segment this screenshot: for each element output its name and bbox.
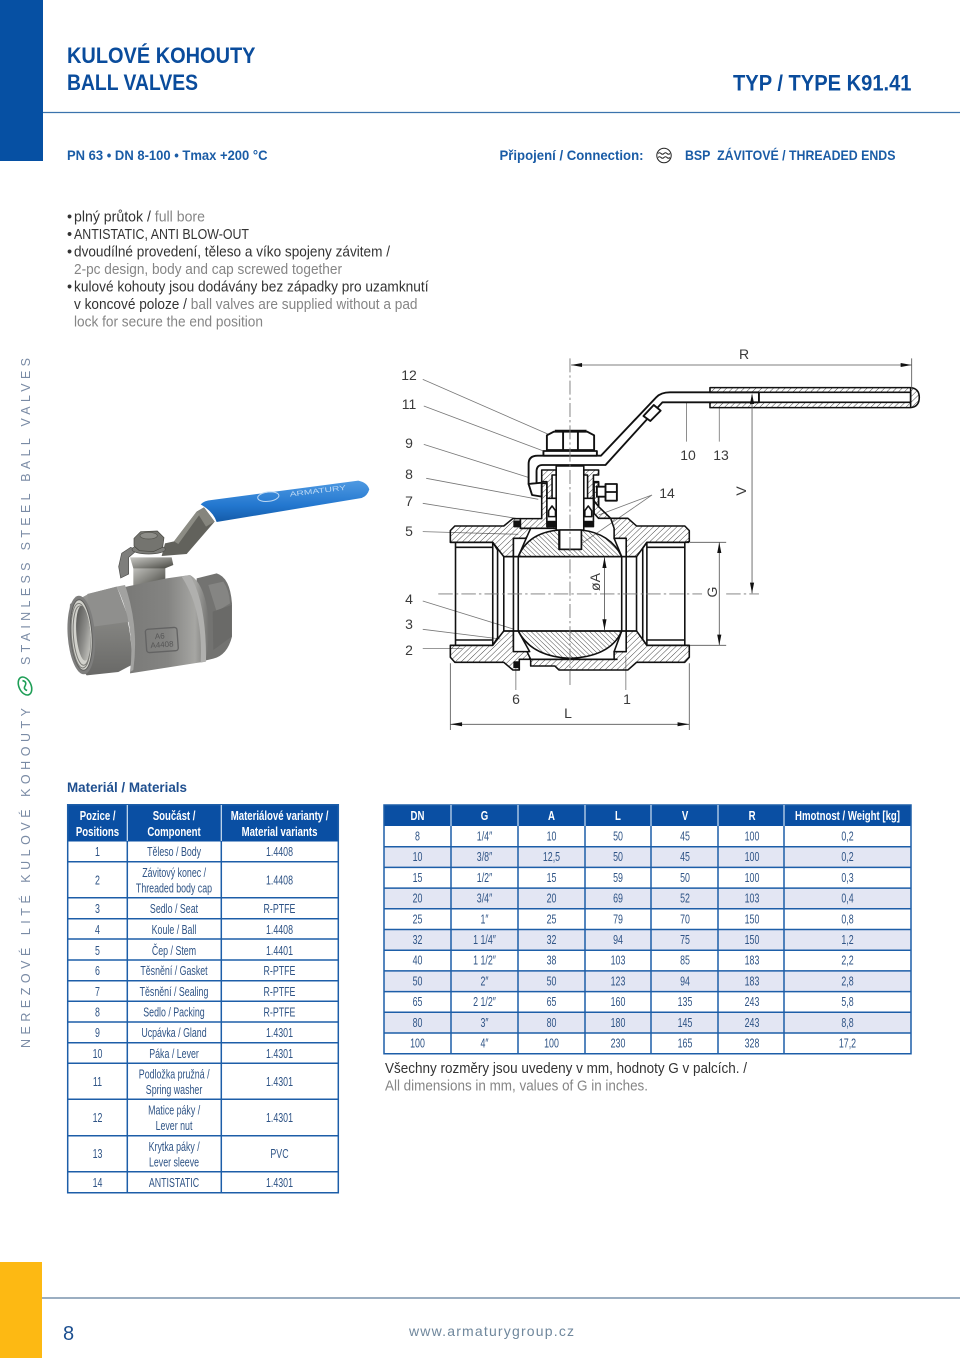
- materials table rows: Matice páky /: [148, 1104, 201, 1118]
- materials table rows: 1.4301: [266, 1075, 293, 1090]
- blue lever sleeve: ARMATURY: [289, 485, 347, 499]
- materials table rows: R-PTFE: [264, 964, 295, 979]
- dimensions table rows: 1,2: [841, 933, 854, 948]
- dimensions table rows: 0,2: [841, 830, 854, 844]
- dimensions table rows: 1 1/4″: [473, 933, 496, 948]
- lever: [529, 392, 759, 501]
- materials table rows: PVC: [270, 1147, 289, 1162]
- materials table rows: ANTISTATIC: [149, 1176, 199, 1191]
- dimensions table rows: 40: [413, 954, 422, 968]
- materials table rows: Čep / Stem: [152, 943, 196, 959]
- dimensions table rows: 165: [678, 1037, 692, 1051]
- dimensions table rows: 1 1/2″: [473, 954, 496, 968]
- dimensions table rows: 3/8″: [477, 851, 492, 865]
- materials table header: Materiálové varianty /: [231, 810, 329, 823]
- icon: green logo: [16, 675, 34, 697]
- dimensions table rows: 150: [745, 913, 759, 927]
- connection type: BSP ZÁVITOVÉ / THREADED ENDS: [685, 147, 896, 163]
- dimensions table rows: 145: [678, 1016, 692, 1030]
- dimensions table header: Hmotnost / Weight [kg]: [795, 810, 900, 823]
- dimensions table rows: 3/4″: [477, 892, 492, 906]
- materials table rows: R-PTFE: [264, 902, 295, 917]
- title: BALL VALVES: [67, 70, 198, 95]
- materials table rows: 14: [93, 1176, 102, 1191]
- materials table rows: Spring washer: [146, 1083, 203, 1098]
- page number: 8: [63, 1323, 74, 1345]
- dimensions table rows: 45: [680, 830, 690, 844]
- drawing position labels: [401, 346, 749, 721]
- dimensions table rows: 50: [613, 830, 623, 844]
- materials table rows: 8: [95, 1006, 100, 1020]
- stem and gland: [514, 466, 599, 667]
- dimensions table rows: [410, 830, 856, 1051]
- drawing position labels: 6: [512, 691, 520, 707]
- dimensions table rows: 3″: [480, 1016, 489, 1030]
- dimensions table rows: 32: [413, 933, 422, 948]
- dimensions table rows: 8,8: [841, 1016, 854, 1030]
- specifications line: PN 63 • DN 8-100 • Tmax +200 °C: [67, 147, 268, 163]
- valve body: [450, 483, 689, 670]
- feature list: [67, 210, 428, 330]
- dimensions table rows: 8: [415, 830, 420, 844]
- dimensions table rows: 25: [413, 913, 422, 927]
- dimensions table rows: 0,3: [841, 871, 854, 885]
- drawing position labels: 14: [659, 485, 675, 501]
- materials table rows: 1: [95, 845, 100, 860]
- dimensions table header: V: [682, 810, 689, 823]
- dimensions table rows: 12,5: [543, 851, 560, 865]
- drawing position labels: 12: [401, 367, 417, 383]
- dimension lines: [450, 358, 912, 730]
- dimensions table rows: 0,4: [841, 892, 854, 906]
- dimensions table rows: 80: [547, 1016, 556, 1030]
- dimensions table rows: 328: [745, 1037, 759, 1051]
- materials table rows: 1.4408: [266, 845, 293, 860]
- connection label: Připojení / Connection:: [500, 147, 644, 163]
- materials table rows: 1.4301: [266, 1176, 293, 1191]
- materials table rows: 9: [95, 1026, 100, 1041]
- dimensions table rows: 243: [745, 996, 759, 1010]
- dimensions table rows: 79: [613, 913, 623, 927]
- feature list: •: [67, 280, 72, 296]
- feature list: •: [67, 245, 72, 261]
- dimensions table header: L: [615, 810, 621, 823]
- dimensions table: [384, 805, 911, 1054]
- feature list: lock for secure the end position: [74, 314, 263, 330]
- dimensions table rows: 94: [613, 933, 623, 948]
- dimensions table rows: 65: [413, 996, 422, 1010]
- dimensions table header: DN: [411, 810, 424, 823]
- dimensions table rows: 2 1/2″: [473, 996, 496, 1010]
- dimensions table rows: 65: [547, 996, 556, 1010]
- materials table rows: 1.4301: [266, 1047, 293, 1062]
- materials table header: Component: [147, 826, 201, 839]
- materials table rows: 1.4301: [266, 1026, 293, 1041]
- dimensions table rows: 123: [611, 975, 625, 989]
- materials table rows: Lever nut: [156, 1119, 192, 1134]
- product photo: ball valve: A6: [155, 631, 165, 641]
- bore lines: [450, 542, 689, 645]
- dimensions table rows: 230: [611, 1037, 625, 1051]
- dimensions table rows: 10: [413, 851, 422, 865]
- product photo: ball valve: A4408: [150, 639, 174, 650]
- dimensions table rows: 52: [680, 892, 690, 906]
- dimensions table rows: 0,8: [841, 913, 854, 927]
- dimensions table rows: 85: [680, 954, 690, 968]
- materials table header: Pozice /: [80, 810, 116, 823]
- dimension arrows: [450, 363, 912, 726]
- materials table rows: 1.4408: [266, 874, 293, 888]
- drawing position labels: 5: [405, 523, 413, 539]
- yellow footer block: [0, 1262, 42, 1358]
- dimensions table rows: 150: [745, 933, 759, 948]
- materials table rows: Lever sleeve: [149, 1156, 199, 1170]
- dimensions table rows: 20: [547, 892, 556, 906]
- materials table rows: Těsnění / Gasket: [140, 964, 208, 979]
- feature list: v koncové poloze / ball valves are supplied without a pad: [74, 297, 418, 313]
- dimensions note: All dimensions in mm, values of G in inches.: [385, 1078, 648, 1094]
- vertical side text: NEREZOVÉ LITÉ KULOVÉ KOHOUTY: [18, 707, 33, 1048]
- materials table rows: Threaded body cap: [136, 882, 212, 896]
- dimensions table rows: 100: [745, 851, 759, 865]
- materials table rows: 2: [95, 874, 100, 888]
- title: [67, 43, 256, 95]
- feature list: •: [67, 210, 72, 226]
- title: KULOVÉ KOHOUTY: [67, 43, 256, 68]
- materials table header: Součást /: [153, 810, 196, 823]
- dimensions table rows: 2″: [480, 975, 489, 989]
- materials table rows: Sedlo / Seat: [150, 902, 198, 917]
- dimensions table rows: 100: [410, 1037, 425, 1051]
- leader lines: [423, 379, 719, 690]
- washer and nut: [543, 451, 597, 456]
- dimensions table rows: 32: [547, 933, 556, 948]
- drawing position labels: R: [739, 346, 749, 362]
- drawing position labels: V: [733, 486, 749, 496]
- vertical side text: [18, 358, 33, 1048]
- drawing position labels: 10: [680, 447, 696, 463]
- materials table rows: R-PTFE: [264, 985, 295, 1000]
- icon: threaded connection: [657, 148, 671, 163]
- dimensions table rows: 183: [745, 975, 759, 989]
- drawing position labels: 1: [623, 691, 631, 707]
- dimensions table rows: 4″: [480, 1037, 489, 1051]
- dimensions note: [385, 1061, 748, 1094]
- materials table rows: Koule / Ball: [152, 923, 196, 938]
- drawing position labels: øA: [587, 572, 603, 591]
- materials table rows: 7: [95, 985, 100, 1000]
- dimensions table rows: 50: [680, 871, 690, 885]
- seats: [513, 538, 626, 652]
- drawing position labels: 2: [405, 642, 413, 658]
- dimensions table rows: 180: [611, 1016, 625, 1030]
- materials table rows: Těleso / Body: [147, 845, 201, 860]
- dimensions table rows: 15: [547, 871, 556, 885]
- drawing position labels: 13: [713, 447, 729, 463]
- materials table rows: Krytka páky /: [149, 1140, 200, 1155]
- materials table rows: Páka / Lever: [149, 1047, 199, 1062]
- materials table header: Positions: [76, 826, 119, 839]
- feature list: kulové kohouty jsou dodávány bez západky pro uzamknutí: [74, 280, 428, 296]
- vertical side text: STAINLESS STEEL BALL VALVES: [19, 358, 33, 665]
- dimensions table rows: 50: [613, 851, 623, 865]
- materials table rows: R-PTFE: [264, 1006, 295, 1020]
- product photo: ball valve: [65, 481, 369, 675]
- blue corner block: [0, 0, 43, 161]
- dimensions table rows: 80: [413, 1016, 422, 1030]
- website: www.armaturygroup.cz: [408, 1323, 574, 1339]
- drawing position labels: 3: [405, 616, 413, 632]
- dimensions table rows: 20: [413, 892, 422, 906]
- materials table rows: 12: [93, 1111, 102, 1126]
- materials table rows: 6: [95, 964, 100, 979]
- dimensions table rows: 1/4″: [477, 830, 492, 844]
- dimensions table rows: 75: [680, 933, 690, 948]
- dimensions table rows: 135: [678, 996, 692, 1010]
- drawing position labels: G: [704, 587, 720, 597]
- dimensions table rows: 2,2: [841, 954, 854, 968]
- centre lines: [438, 358, 759, 685]
- materials table rows: Sedlo / Packing: [143, 1006, 205, 1020]
- feature list: ANTISTATIC, ANTI BLOW-OUT: [74, 227, 249, 243]
- dimensions table rows: 160: [611, 996, 625, 1010]
- materials table: [68, 805, 338, 1193]
- materials table rows: 5: [95, 944, 100, 959]
- dimensions table header: A: [548, 810, 555, 823]
- dimensions table rows: 15: [413, 871, 422, 885]
- drawing position labels: 7: [405, 493, 413, 509]
- dimensions table header: R: [749, 810, 756, 823]
- dimensions table rows: 50: [413, 975, 422, 989]
- valve section drawing: [423, 358, 919, 730]
- materials table rows: Těsnění / Sealing: [140, 985, 208, 1000]
- materials table rows: [93, 845, 295, 1191]
- drawing position labels: 4: [405, 591, 413, 607]
- dimensions table rows: 100: [544, 1037, 559, 1051]
- materials table rows: 13: [93, 1147, 102, 1162]
- materials table rows: Ucpávka / Gland: [141, 1026, 207, 1041]
- drawing position labels: L: [564, 705, 572, 721]
- dimensions table rows: 38: [547, 954, 556, 968]
- feature list: dvoudílné provedení, těleso a víko spojeny závitem /: [74, 245, 391, 261]
- dimensions table rows: 69: [613, 892, 623, 906]
- dimensions table rows: 45: [680, 851, 690, 865]
- dimensions table rows: 1″: [480, 913, 489, 927]
- dimensions table rows: 2,8: [841, 975, 854, 989]
- dimensions table rows: 0,2: [841, 851, 854, 865]
- dimensions table rows: 10: [547, 830, 556, 844]
- dimensions table rows: 1/2″: [477, 871, 492, 885]
- lever sleeve: [710, 388, 919, 408]
- materials table rows: 1.4408: [266, 923, 293, 938]
- materials table rows: 1.4301: [266, 1111, 293, 1126]
- dimensions table rows: 100: [745, 830, 759, 844]
- dimensions table rows: 103: [611, 954, 625, 968]
- dimensions table rows: 17,2: [839, 1037, 856, 1051]
- dimensions table header: [411, 810, 900, 823]
- dimensions table rows: 25: [547, 913, 556, 927]
- materials heading: Materiál / Materials: [67, 779, 187, 795]
- ball: [518, 530, 622, 557]
- materials table rows: 10: [93, 1047, 102, 1062]
- dimensions table header: G: [481, 810, 488, 823]
- drawing position labels: 11: [402, 396, 416, 412]
- materials table rows: 3: [95, 902, 100, 917]
- dimensions table rows: 70: [680, 913, 690, 927]
- blue lever sleeve: [201, 481, 369, 522]
- drawing position labels: 8: [405, 466, 413, 482]
- materials table rows: Závitový konec /: [142, 866, 207, 881]
- drawing position labels: 9: [405, 435, 413, 451]
- dimensions table rows: 243: [745, 1016, 759, 1030]
- materials table header: [76, 810, 329, 839]
- dimensions table rows: 183: [745, 954, 759, 968]
- dimensions table rows: 100: [745, 871, 759, 885]
- feature list: 2-pc design, body and cap screwed together: [74, 262, 342, 278]
- feature list: plný průtok / full bore: [74, 210, 205, 226]
- dimensions table rows: 59: [613, 871, 623, 885]
- dimensions table rows: 5,8: [841, 996, 854, 1010]
- feature list: •: [67, 227, 72, 243]
- materials table rows: 1.4401: [266, 944, 293, 959]
- materials table rows: 11: [93, 1075, 102, 1090]
- dimensions note: Všechny rozměry jsou uvedeny v mm, hodnoty G v palcích. /: [385, 1061, 748, 1077]
- materials table rows: Podložka pružná /: [139, 1068, 210, 1082]
- materials table header: Material variants: [242, 826, 317, 839]
- dimensions table rows: 103: [745, 892, 759, 906]
- dimensions table rows: 94: [680, 975, 690, 989]
- dimensions table rows: 50: [547, 975, 556, 989]
- materials table rows: 4: [95, 923, 100, 938]
- type heading: TYP / TYPE K91.41: [733, 70, 912, 96]
